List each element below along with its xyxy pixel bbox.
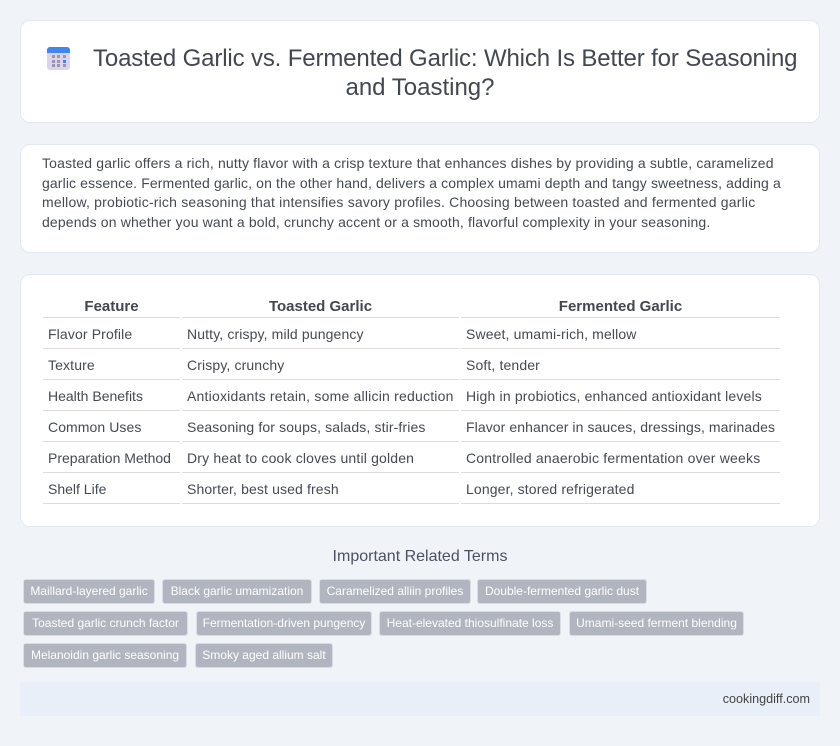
row: flavor profile: Flavor Profile: [48, 326, 132, 342]
tags: related terms: Black garlic umamization: [171, 584, 303, 598]
title: [93, 45, 797, 101]
row: texture: Crispy, crunchy: [187, 357, 284, 373]
row: common uses: Flavor enhancer in sauces, dressings, marinades: [466, 419, 775, 435]
row: common uses: Seasoning for soups, salads, stir-fries: [187, 419, 426, 435]
row: preparation method: Dry heat to cook cloves until golden: [187, 450, 414, 466]
row: flavor profile: Sweet, umami-rich, mellow: [466, 326, 637, 342]
row: preparation method: Preparation Method: [48, 450, 171, 466]
row: flavor profile: [48, 326, 637, 342]
heading: related terms: Important Related Terms: [333, 548, 507, 565]
tags: related terms: Fermentation-driven pungency: [203, 616, 365, 630]
panel: title card: [20, 20, 820, 123]
row: shelf life: Shelf Life: [48, 481, 106, 497]
tags: related terms: Smoky aged allium salt: [202, 648, 326, 662]
row: health benefits: High in probiotics, enhanced antioxidant levels: [466, 388, 762, 404]
tags: related terms: [23, 579, 744, 668]
row: common uses: Common Uses: [48, 419, 141, 435]
table header: Toasted Garlic: [269, 298, 372, 315]
row: preparation method: [48, 450, 760, 466]
text block: description: garlic essence. Fermented garlic, on the other hand, delivers a complex umami depth and tangy sweetness, adding a: [42, 174, 781, 190]
row: texture: [48, 357, 540, 373]
row: health benefits: [48, 388, 762, 404]
tags: related terms: Melanoidin garlic seasoning: [31, 648, 179, 662]
tags: related terms: Umami-seed ferment blending: [576, 616, 737, 630]
text block: description: mellow, probiotic-rich seasoning that intensifies savory profiles. Choosing between toasted and fermented garlic: [42, 194, 755, 210]
tags: related terms: Maillard-layered garlic: [30, 584, 148, 598]
footer bar: [20, 682, 820, 716]
title: Toasted Garlic vs. Fermented Garlic: Which Is Better for Seasoning: [93, 45, 797, 72]
row: shelf life: [48, 481, 635, 497]
tags: related terms: Double-fermented garlic dust: [485, 584, 639, 598]
row: shelf life: Longer, stored refrigerated: [466, 481, 635, 497]
text block: description: [42, 155, 781, 230]
title: and Toasting?: [345, 74, 494, 101]
row: texture: Texture: [48, 357, 95, 373]
table header: Fermented Garlic: [559, 298, 682, 315]
row: common uses: [48, 419, 775, 435]
row: texture: Soft, tender: [466, 357, 540, 373]
tags: related terms: Heat-elevated thiosulfinate loss: [387, 616, 553, 630]
table header: Feature: [84, 298, 139, 315]
row: preparation method: Controlled anaerobic fermentation over weeks: [466, 450, 760, 466]
row: flavor profile: Nutty, crispy, mild pungency: [187, 326, 364, 342]
text block: description: Toasted garlic offers a rich, nutty flavor with a crisp texture that enhances dishes by providing a subtle, caramelized: [42, 155, 774, 171]
text block: description: depends on whether you want a bold, crunchy accent or a smooth, flavorful complexity in your seasoning.: [42, 214, 710, 230]
table header: [84, 298, 682, 315]
icon: calendar: [47, 47, 70, 70]
footer text: cookingdiff.com: [723, 692, 810, 706]
panel: comparison table: [20, 274, 820, 527]
row: shelf life: Shorter, best used fresh: [187, 481, 339, 497]
row: health benefits: Antioxidants retain, some allicin reduction: [187, 388, 454, 404]
row: health benefits: Health Benefits: [48, 388, 143, 404]
tags: related terms: Caramelized alliin profiles: [327, 584, 463, 598]
panel: description: [20, 144, 820, 253]
tags: related terms: Toasted garlic crunch factor: [32, 616, 179, 630]
